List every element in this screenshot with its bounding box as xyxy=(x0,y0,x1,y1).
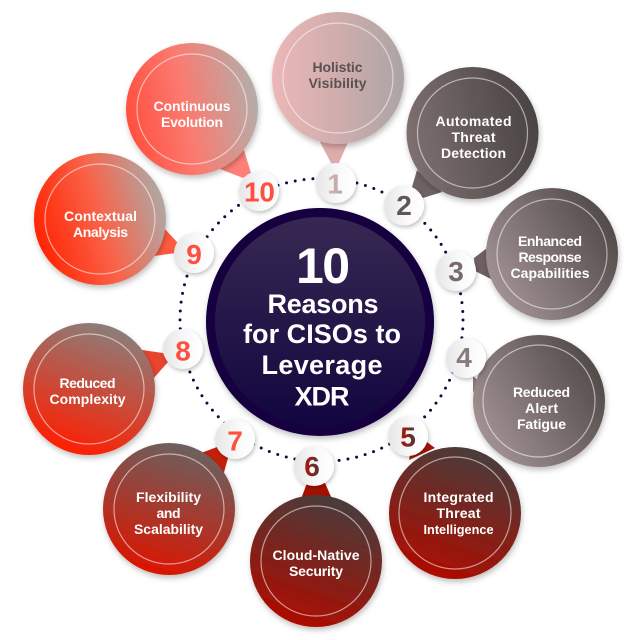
title: XDR xyxy=(294,382,350,412)
item 8: Reduced Complexity: Complexity xyxy=(50,391,126,407)
item 4: Reduced Alert Fatigue: Fatigue xyxy=(517,416,566,432)
number badge 3: 3 xyxy=(448,256,464,287)
number badge 1: 1 xyxy=(327,168,343,200)
number badge 7 xyxy=(215,419,255,459)
item 2: Automated Threat Detection xyxy=(406,67,538,199)
number badge 9: 9 xyxy=(186,239,202,270)
item 9: Contextual Analysis: Analysis xyxy=(73,224,128,240)
title xyxy=(243,238,401,412)
item 10: Continuous Evolution xyxy=(126,43,258,178)
number badge 8: 8 xyxy=(175,336,191,366)
number badge 10 xyxy=(239,171,279,211)
item 4: Reduced Alert Fatigue: Reduced xyxy=(513,384,570,400)
item 3: Enhanced Response Capabilities: Capabilities xyxy=(510,265,590,281)
item 5: Integrated Threat Intelligence: Integrated xyxy=(424,489,494,505)
center circle xyxy=(206,208,434,436)
item 7: Flexibility and Scalability: Scalability xyxy=(134,521,203,537)
item 5: Integrated Threat Intelligence: Threat xyxy=(436,505,481,521)
title: for CISOs to xyxy=(243,319,401,349)
number badge 6 xyxy=(294,446,334,486)
dotted ring xyxy=(180,178,463,462)
number badge 9 xyxy=(174,233,214,273)
number badge 5 xyxy=(388,416,428,456)
item 8: Reduced Complexity: Reduced xyxy=(60,375,116,391)
item 1: Holistic Visibility: Holistic xyxy=(312,59,363,75)
number badge 7: 7 xyxy=(227,426,243,456)
title: Leverage xyxy=(262,350,382,380)
item 7: Flexibility and Scalability xyxy=(103,443,235,575)
item 9: Contextual Analysis: Contextual xyxy=(64,208,137,224)
item 1: Holistic Visibility xyxy=(272,12,404,165)
number badge 3 xyxy=(436,251,476,291)
item 5: Integrated Threat Intelligence: Intelligence xyxy=(424,523,494,537)
item 3: Enhanced Response Capabilities: Response xyxy=(518,249,582,265)
item 4: Reduced Alert Fatigue xyxy=(473,335,605,467)
item 4: Reduced Alert Fatigue: Alert xyxy=(525,400,558,416)
item 3: Enhanced Response Capabilities: Enhanced xyxy=(518,233,582,249)
item 10: Continuous Evolution: Evolution xyxy=(161,114,223,130)
item 10: Continuous Evolution: Continuous xyxy=(154,98,231,114)
item 6: Cloud-Native Security: Cloud-Native xyxy=(272,547,360,563)
item 1: Holistic Visibility: Visibility xyxy=(308,75,367,91)
item 5: Integrated Threat Intelligence xyxy=(389,442,521,579)
item 6: Cloud-Native Security xyxy=(250,483,382,627)
title: 10 xyxy=(296,238,350,294)
number badge 2: 2 xyxy=(396,190,412,221)
number badge 5: 5 xyxy=(400,422,416,452)
number badge 2 xyxy=(384,186,424,226)
title: Reasons xyxy=(268,289,378,319)
item 3: Enhanced Response Capabilities xyxy=(474,188,618,320)
item 2: Automated Threat Detection: Threat xyxy=(452,129,496,145)
item 7: Flexibility and Scalability: Flexibility xyxy=(136,489,201,505)
item 2: Automated Threat Detection: Detection xyxy=(441,145,506,161)
item 2: Automated Threat Detection: Automated xyxy=(436,113,512,129)
number badge 1 xyxy=(316,163,356,203)
number badge 4: 4 xyxy=(456,342,472,373)
item 9: Contextual Analysis xyxy=(34,153,177,285)
item 8: Reduced Complexity xyxy=(23,323,168,455)
item 6: Cloud-Native Security: Security xyxy=(289,563,343,579)
number badge 10: 10 xyxy=(244,176,275,208)
number badge 8 xyxy=(163,329,203,369)
number badge 4 xyxy=(446,338,486,378)
item 7: Flexibility and Scalability: and xyxy=(156,505,180,521)
number badge 6: 6 xyxy=(304,451,320,482)
